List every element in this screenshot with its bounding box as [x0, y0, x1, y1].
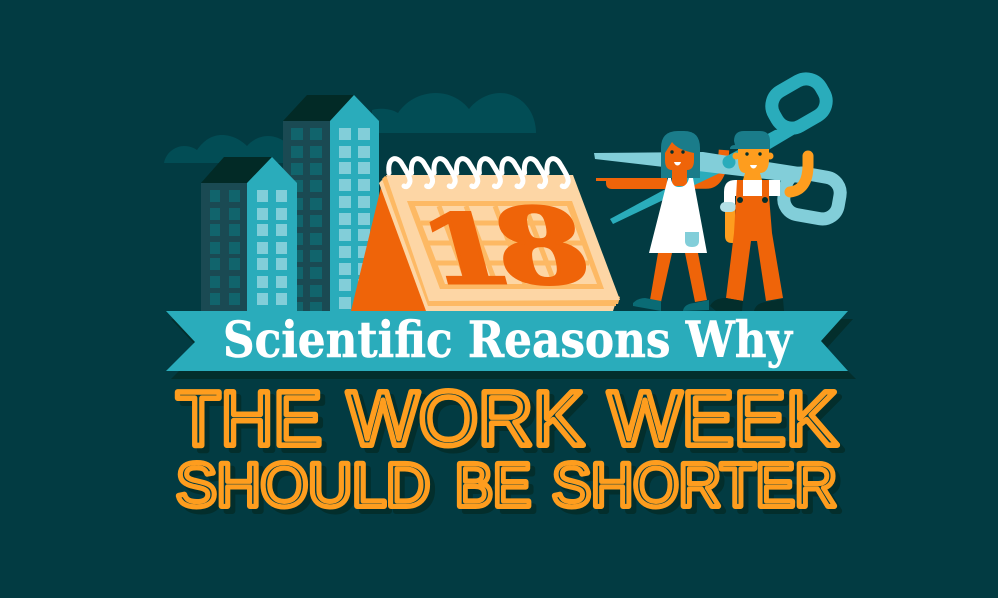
title line: Should Be Shorter: BE: [455, 451, 531, 519]
scissors: upper teal handle and lower blade: [610, 73, 832, 224]
man overalls: [726, 180, 783, 301]
title shadow: WEEK: [613, 381, 843, 467]
calendar back pages: [379, 180, 616, 311]
title shadow: SHOULD: [181, 456, 435, 524]
calendar stand: [351, 187, 427, 311]
title line: The Work Week: WEEK: [608, 376, 838, 462]
title shadow: [181, 381, 843, 524]
title shadow: BE: [460, 456, 536, 524]
man overall buttons: [737, 197, 768, 203]
woman eyes and smile: [670, 150, 685, 166]
banner: [166, 311, 848, 371]
man neck and face: [738, 149, 769, 180]
man eyes and smile: [745, 152, 762, 168]
title line: The Work Week: WORK: [347, 376, 584, 462]
title shadow: SHORTER: [557, 456, 842, 524]
scissors: light blade and handle: [594, 152, 843, 221]
title line: Should Be Shorter: BE: [455, 451, 531, 519]
woman legs: [650, 253, 672, 302]
man shoes: [710, 298, 743, 311]
woman shoes: [633, 298, 661, 311]
building: back tower: [283, 95, 379, 311]
person: woman: [596, 131, 709, 311]
cloud: right: [372, 93, 536, 133]
calendar grid: [407, 201, 604, 289]
man shirt: [724, 180, 780, 204]
title line: The Work Week: WORK: [347, 376, 584, 462]
banner text: Scientific Reasons Why: [223, 310, 794, 369]
scissors: [594, 73, 843, 224]
calendar: [351, 159, 620, 311]
man left arm: [725, 200, 735, 243]
title line: The Work Week: WEEK: [608, 376, 838, 462]
title line: Should Be Shorter: SHOULD: [176, 451, 430, 519]
woman raised arm: [690, 150, 724, 184]
calendar number 18: 8: [482, 185, 600, 308]
man cap: [730, 131, 770, 149]
cloud: left: [164, 135, 292, 163]
title line: Should Be Shorter: SHORTER: [552, 451, 837, 519]
woman pocket: [685, 232, 699, 247]
title shadow: THE: [181, 381, 327, 467]
title line: Should Be Shorter: SHORTER: [552, 451, 837, 519]
title line: The Work Week: [176, 376, 838, 462]
scissors: pivot: [722, 156, 736, 168]
woman pointing arm: [596, 178, 667, 189]
title line: Should Be Shorter: SHOULD: [176, 451, 430, 519]
man sleeve cuff: [720, 202, 736, 212]
calendar spiral rings: [389, 159, 568, 187]
title line: The Work Week: THE: [176, 376, 322, 462]
banner shadow: [171, 319, 856, 379]
woman neck and face: [665, 142, 694, 186]
calendar number 18: 1: [409, 194, 523, 306]
calendar front page: [386, 175, 620, 301]
person: man: [710, 131, 808, 311]
title line: Should Be Shorter: [176, 451, 837, 519]
building: front tower: [201, 157, 297, 311]
woman hair back: [661, 131, 700, 178]
man right arm: [790, 156, 808, 192]
woman dress: [649, 178, 707, 253]
title line: The Work Week: THE: [176, 376, 322, 462]
calendar number 18: [409, 185, 600, 308]
title shadow: WORK: [352, 381, 589, 467]
